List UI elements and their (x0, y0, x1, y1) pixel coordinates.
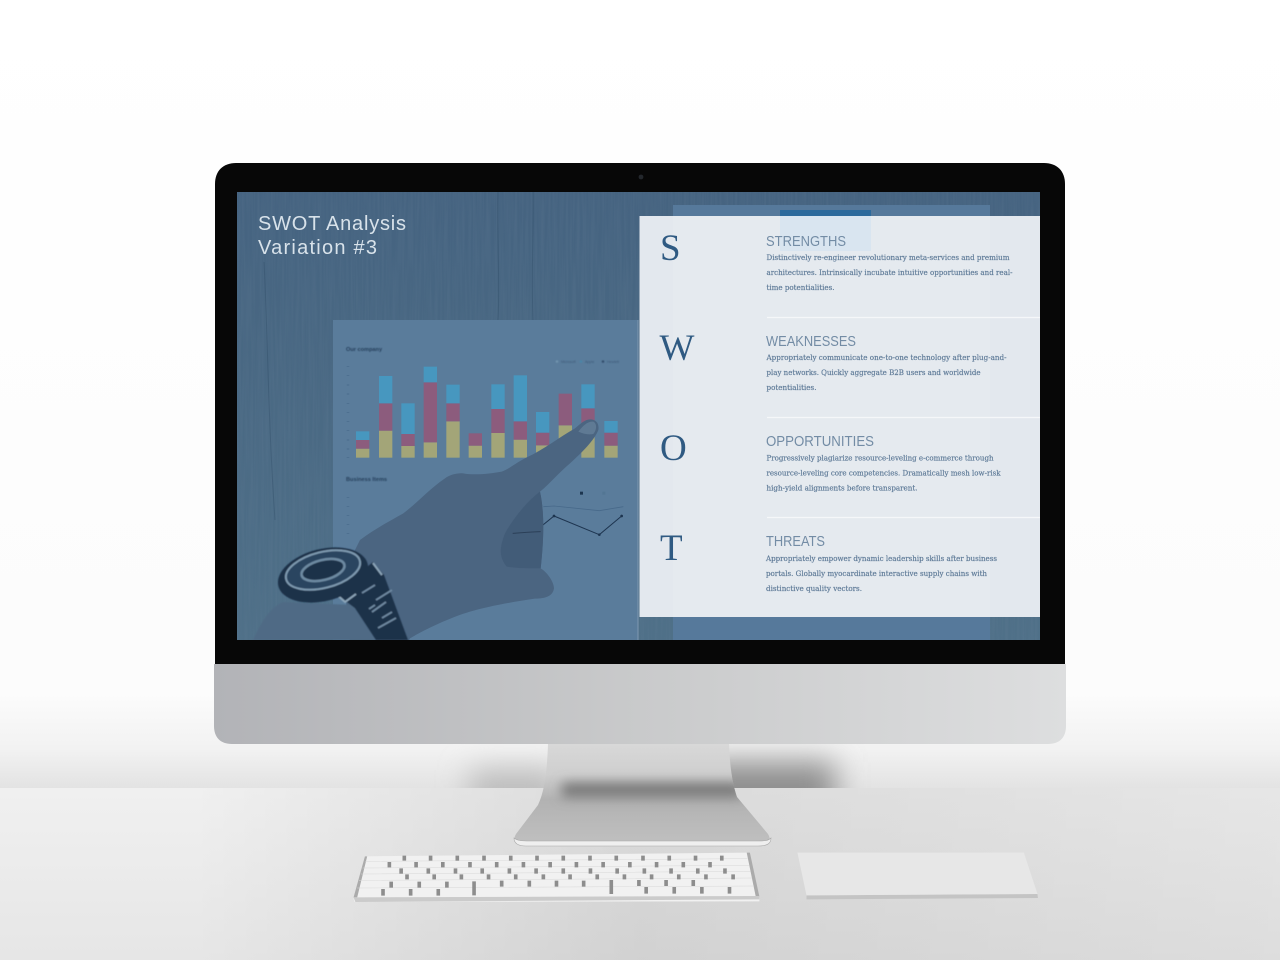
chart paper (333, 320, 638, 640)
wristwatch (278, 546, 408, 640)
chart title: our company: Our company (346, 347, 383, 353)
line chart (540, 492, 623, 536)
monitor stand (514, 744, 771, 846)
text: threats description: portals. Globally myocardinate interactive supply chains with (766, 569, 987, 578)
stacked bar chart (347, 367, 618, 534)
heading: opportunities: OPPORTUNITIES (766, 434, 874, 450)
chart title: business items: Business Items (346, 477, 387, 483)
text: opportunities description (766, 454, 1001, 492)
letter T: T (660, 528, 683, 569)
section: opportunities (662, 435, 1001, 492)
wood background (237, 192, 1040, 640)
text: weaknesses description: play networks. Quickly aggregate B2B users and worldwide (766, 368, 981, 377)
screen (237, 192, 1040, 642)
trackpad (797, 853, 1038, 899)
text: strengths description: architectures. Intrinsically incubate intuitive opportunities and real- (766, 268, 1013, 277)
hand pointing at chart (343, 419, 599, 642)
text: opportunities description: Progressively plagiarize resource-leveling e-commerce through (766, 454, 994, 462)
forearm below watch (256, 604, 350, 640)
chart legend (556, 360, 619, 364)
text: threats description (765, 554, 997, 593)
text: strengths description: time potentialities. (766, 283, 834, 292)
monitor bezel (215, 163, 1065, 664)
background paper behind panel (673, 205, 990, 640)
text: threats description: distinctive quality vectors. (766, 584, 862, 593)
title: SWOT Analysis (258, 213, 406, 235)
chart legend: Microsoft (561, 360, 576, 364)
text: opportunities description: high-yield alignments before transparent. (766, 484, 918, 492)
monitor chin (214, 664, 1066, 744)
heading: weaknesses: WEAKNESSES (766, 334, 856, 350)
keyboard (354, 853, 759, 902)
letter S: S (660, 228, 681, 269)
section: threats (660, 536, 997, 593)
text: strengths description (766, 253, 1013, 292)
section: weaknesses (660, 336, 1006, 392)
chart legend: Apple (585, 360, 594, 364)
title (258, 215, 406, 254)
panel: SWOT card (640, 216, 1040, 617)
heading: threats: THREATS (766, 534, 825, 550)
heading: strengths: STRENGTHS (766, 234, 846, 250)
text: strengths description: Distinctively re-engineer revolutionary meta-services and premium (766, 253, 1010, 262)
section: strengths (662, 235, 1012, 292)
text: threats description: Appropriately empower dynamic leadership skills after business (765, 554, 997, 563)
letter O: O (660, 428, 687, 469)
monitor shadow on wall (460, 744, 854, 788)
icon: webcam (639, 175, 643, 179)
chart legend: Hewlett (607, 360, 619, 364)
desk surface (0, 788, 1280, 960)
text: weaknesses description: potentialities. (766, 383, 816, 392)
text: weaknesses description (766, 353, 1007, 392)
text: weaknesses description: Appropriately communicate one-to-one technology after plug-and- (766, 353, 1007, 362)
letter W: W (660, 328, 694, 369)
title: Variation #3 (258, 237, 377, 259)
text: opportunities description: resource-leveling core competencies. Dramatically mesh low-risk (766, 468, 1001, 478)
